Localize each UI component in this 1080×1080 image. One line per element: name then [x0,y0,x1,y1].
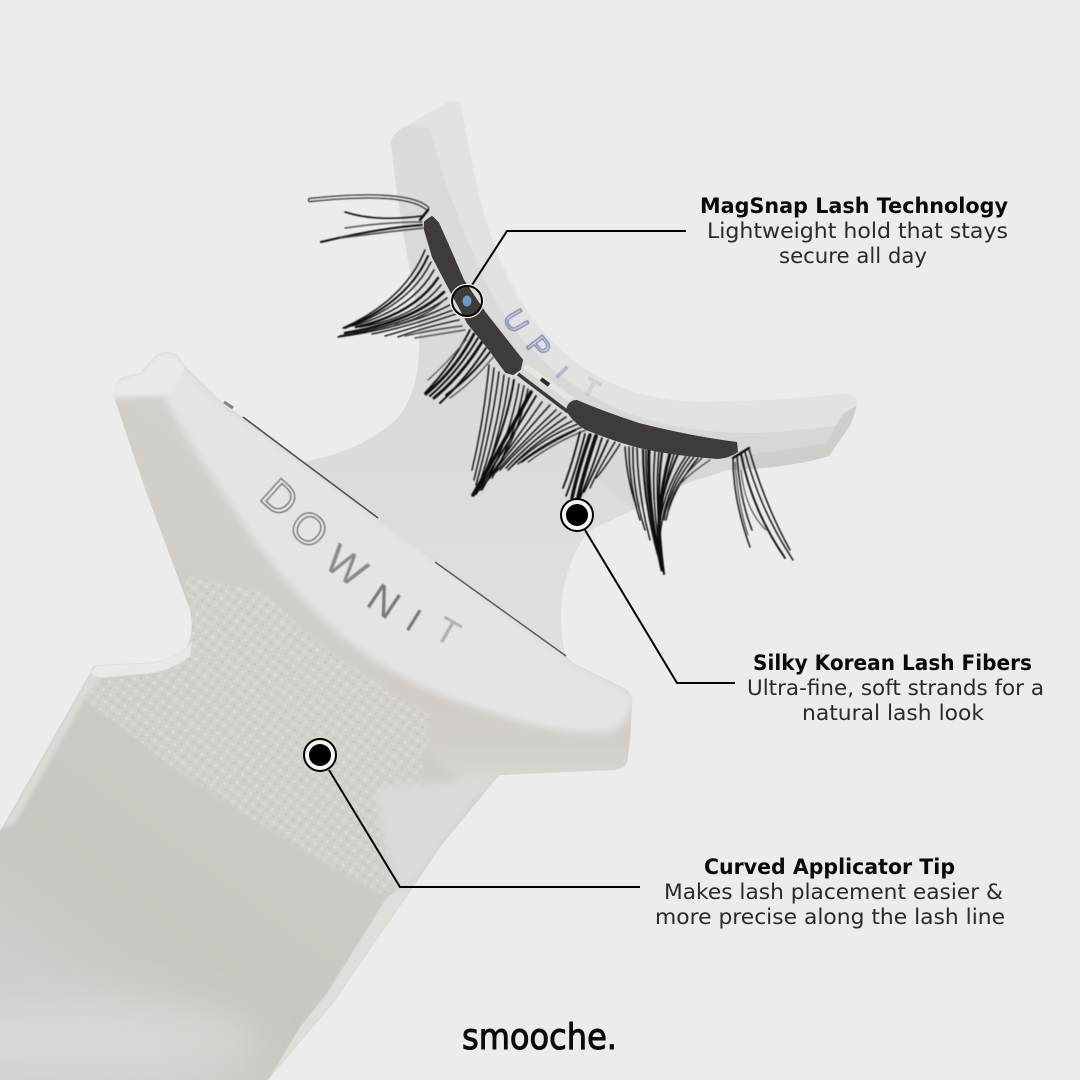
soft highlight on handle [0,1000,260,1080]
text: secure all day [779,244,927,269]
lash cluster: upper fan [338,250,465,338]
lash cluster: outer tip [733,448,793,560]
label: UP IT: T [578,373,604,404]
soft shaded parts clipped to the head [2,352,640,1080]
text [747,651,1044,726]
handle top rim [90,640,192,678]
text [655,855,1005,930]
rounded knob [110,352,187,398]
lash cluster: long right fan [625,447,710,574]
applicator lower head and textured handle [0,352,640,1080]
text: Curved Applicator Tip [704,855,955,880]
label: UP IT [496,304,604,404]
handle outer rim [268,877,420,1080]
label: DOWN IT: T [428,608,468,655]
marker [561,499,593,531]
label: DOWN IT: D [251,470,308,527]
text: Ultra-fine, soft strands for a [747,676,1044,701]
label: UP IT: P [520,330,557,365]
lash cluster: small dark fan [425,330,494,403]
text: Makes lash placement easier & [664,880,1003,905]
label: UP IT: U [496,304,534,339]
magnetic strip: lower [566,400,738,459]
label: DOWN IT: W [316,535,376,596]
dotted grip texture [83,575,430,897]
text [700,194,1008,269]
inset seam lines [243,417,378,518]
label: DOWN IT: N [359,576,408,628]
label: DOWN IT: O [280,500,337,559]
marker [304,739,336,771]
product: lash applicator [0,101,857,1080]
lighter grip notch [374,782,480,890]
text: Lightweight hold that stays [707,219,1008,244]
lash cluster: top horizontal [310,196,428,242]
lash cluster: large double fan [472,365,586,495]
text: Silky Korean Lash Fibers [753,651,1032,676]
handle left rim [2,665,100,828]
tip underside [459,726,631,784]
callout: Curved Applicator Tip [304,739,1005,930]
magnetic strip: upper [425,217,522,374]
metal spine between magnets [518,366,572,412]
label: UP IT: I [552,363,571,382]
lash cluster: short fan above dot [563,432,620,502]
leader line [329,770,640,887]
marker: blue magnet dot [450,284,484,318]
text: natural lash look [802,701,985,726]
text: more precise along the lash line [655,905,1005,930]
callout: MagSnap Lash Technology [450,194,1008,318]
label: DOWN IT [251,470,468,655]
logo: smooche.: smooche. [462,1017,617,1058]
lash clusters [310,196,793,574]
callout: Silky Korean Lash Fibers [561,499,1044,726]
leader line [585,530,735,683]
applicator upper arm: UP IT [290,101,857,660]
curved top band [163,368,632,732]
leader line [472,231,686,285]
label: DOWN IT: I [399,602,428,639]
text: MagSnap Lash Technology [700,194,1008,219]
